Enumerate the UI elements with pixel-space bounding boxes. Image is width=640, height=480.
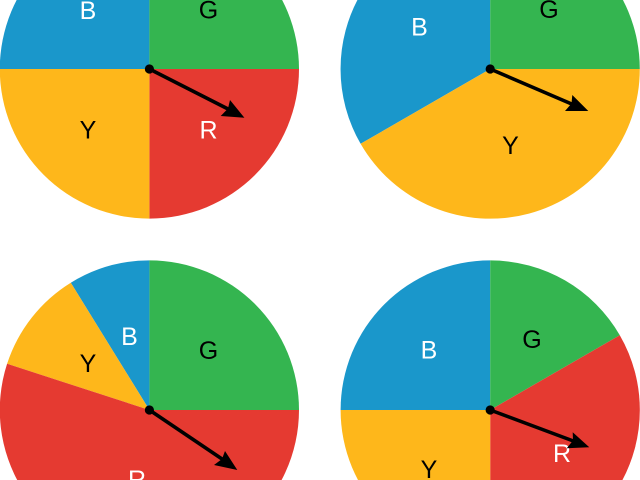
wedge: red [0, 364, 299, 480]
wedge: yellow [341, 410, 490, 480]
spinner: bottom left [0, 260, 299, 480]
label: Y: Y [80, 350, 97, 378]
label: Y: Y [80, 116, 97, 144]
arrow: pointer [486, 64, 588, 111]
wedge: green [149, 260, 299, 410]
label: G: G [522, 326, 542, 354]
wedge: blue [0, 0, 149, 69]
wedge: green [490, 0, 640, 69]
label: R: R [553, 440, 571, 468]
label: B: B [121, 323, 138, 351]
wedge: yellow [7, 283, 149, 410]
arrow: pointer [145, 405, 237, 470]
label: Y: Y [502, 132, 519, 160]
wedge: green [149, 0, 299, 69]
spinner: top right [341, 0, 640, 219]
wedge: blue [341, 260, 490, 410]
label: B: B [421, 336, 437, 364]
wedge: yellow [361, 69, 640, 219]
spinner: top left [0, 0, 299, 219]
arrow: pointer [486, 405, 589, 448]
label: G: G [199, 337, 218, 365]
label: R: R [199, 116, 218, 144]
wedge: red [149, 69, 299, 219]
wedge: red [490, 335, 640, 480]
wedge: green [490, 260, 620, 410]
label: B: B [411, 14, 428, 42]
wedge: blue [341, 0, 490, 144]
wedge: yellow [0, 69, 149, 219]
spinner: bottom right [341, 260, 640, 480]
arrow: pointer [145, 64, 244, 118]
wedge: blue [71, 260, 149, 410]
